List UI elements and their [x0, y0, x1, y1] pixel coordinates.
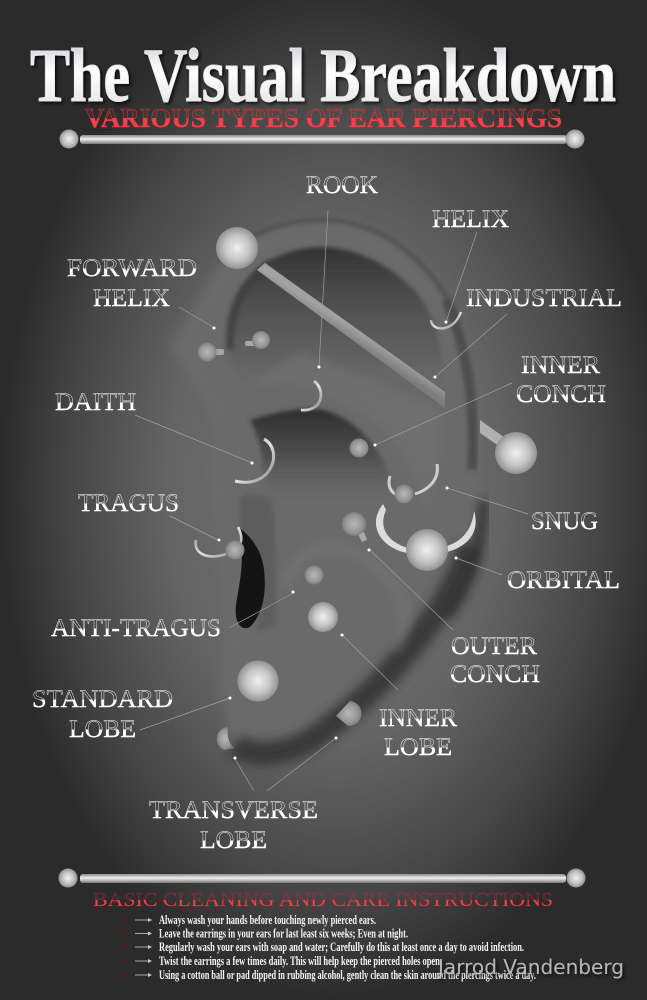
label: standard lobe: STANDARD: [32, 686, 173, 713]
label: standard lobe: [32, 686, 173, 743]
label: rook: ROOK: [306, 172, 378, 199]
label: inner lobe: INNER: [379, 705, 457, 732]
ear cast shadow: [442, 500, 478, 612]
label: inner conch: INNER: [521, 352, 600, 379]
bottom barbell divider: [58, 868, 586, 888]
label: forward helix: [67, 255, 197, 312]
label: outer conch: CONCH: [450, 661, 540, 688]
piercing: rook ring: [301, 381, 321, 410]
top barbell divider: [60, 130, 584, 148]
concha ridge: [285, 547, 405, 650]
instruction lines: Leave the earrings in your ears for last least six weeks; Even at night.: [159, 926, 408, 940]
piercing: inner conch stud: [350, 438, 368, 458]
care instructions heading: BASIC CLEANING AND CARE INSTRUCTIONS: [93, 889, 553, 911]
subtitle: VARIOUS TYPES OF EAR PIERCINGS: [85, 103, 562, 133]
piercing: helix ring: [431, 312, 461, 328]
label: daith: DAITH: [55, 389, 136, 416]
instruction lines: Always wash your hands before touching newly pierced ears.: [159, 912, 376, 927]
step markers: [122, 918, 126, 978]
label: outer conch: [450, 633, 540, 688]
label: tragus: TRAGUS: [78, 490, 179, 517]
piercing: tragus ring: [196, 527, 244, 560]
label: transverse lobe: LOBE: [200, 827, 267, 854]
piercing: standard lobe: [238, 660, 278, 702]
label: orbital: ORBITAL: [507, 567, 620, 594]
ear canal: [236, 527, 265, 628]
label: transverse lobe: TRANSVERSE: [149, 797, 318, 824]
label: forward helix: FORWARD: [67, 255, 197, 282]
antihelix fold: [240, 350, 440, 510]
piercing: industrial barbell: [216, 227, 537, 474]
label: transverse lobe: [149, 797, 318, 854]
label: inner lobe: [379, 705, 457, 761]
label: industrial: INDUSTRIAL: [466, 285, 622, 312]
label: inner conch: CONCH: [516, 381, 606, 408]
piercing: orbital ring: [376, 504, 476, 571]
piercing: snug ring: [389, 464, 437, 504]
instruction lines: Twist the earrings a few times daily. This will help keep the pierced holes open.: [159, 953, 442, 968]
helix rim shading: [446, 300, 473, 470]
ear illustration: [170, 220, 537, 758]
scapha inner left shadow: [230, 262, 272, 350]
label: forward helix: HELIX: [93, 285, 170, 312]
label: snug: SNUG: [531, 508, 598, 535]
piercing: forward helix: [198, 331, 270, 362]
canal shadow: [239, 495, 276, 632]
piercing: anti-tragus stud: [304, 566, 324, 584]
leader lines: [135, 210, 528, 791]
piercing: inner lobe / transverse ends: [217, 701, 362, 750]
watermark: Jarrod Vandenberg: [436, 955, 624, 979]
label: outer conch: OUTER: [451, 633, 537, 660]
piercing: inner conch lower bead: [308, 602, 338, 632]
label: anti-tragus: ANTI-TRAGUS: [51, 615, 221, 642]
helix top shadow: [222, 220, 458, 320]
care instructions list: [122, 912, 536, 982]
label: helix: HELIX: [432, 206, 509, 233]
ear body: [170, 220, 480, 758]
piercing: outer conch stud: [342, 512, 367, 542]
label: standard lobe: LOBE: [69, 716, 136, 743]
lobe shading: [235, 545, 470, 753]
instruction lines: [159, 912, 536, 982]
label: inner lobe: LOBE: [384, 734, 452, 761]
scapha bowl: [228, 247, 444, 424]
arrows: [135, 918, 152, 977]
label: inner conch: [516, 352, 606, 408]
conch bowl: [250, 409, 392, 515]
piercing: daith ring: [235, 439, 274, 482]
